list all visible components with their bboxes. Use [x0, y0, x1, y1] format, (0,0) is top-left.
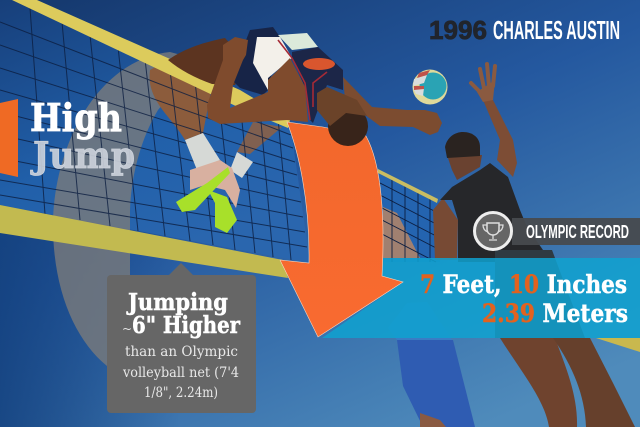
navy shorts	[232, 27, 280, 95]
socks	[185, 133, 253, 178]
heading: 1996 Charles Austin: 1996	[429, 15, 487, 45]
chest logo	[303, 58, 335, 70]
cyan result band	[322, 258, 640, 338]
red singlet trim	[278, 40, 327, 120]
high jumper athlete	[168, 27, 442, 233]
title: High Jump	[30, 95, 135, 177]
callout: comparison to net height: than an Olympic	[125, 344, 238, 360]
white jersey panel	[253, 37, 292, 90]
record measurement: meters: 2.39 Meters	[482, 299, 628, 328]
net mesh	[0, 8, 307, 260]
far arm	[343, 77, 442, 135]
net right band end	[596, 338, 640, 352]
race bib	[278, 33, 318, 50]
title: High Jump: Jump	[30, 135, 135, 177]
blue-shorts player	[388, 302, 475, 427]
upper thigh	[168, 38, 245, 85]
athlete rear legs behind the net	[150, 60, 282, 154]
orange arrow	[280, 122, 403, 337]
net bottom band	[0, 205, 288, 278]
legs	[500, 338, 577, 427]
callout: comparison to net height: 1/8", 2.24m)	[144, 385, 218, 401]
section tab	[0, 99, 18, 177]
callout: comparison to net height: volleyball net (7'4	[122, 365, 239, 381]
back player in black	[433, 64, 635, 427]
raised hand	[471, 64, 495, 102]
volleyball net panel	[0, 0, 310, 263]
volleyball	[412, 70, 448, 104]
lime shoes	[176, 167, 237, 233]
callout: comparison to net height	[107, 263, 256, 413]
heading: 1996 Charles Austin	[429, 15, 620, 45]
callout: comparison to net height: 6" Higher	[132, 312, 241, 339]
neck	[447, 155, 482, 180]
title: High Jump: High	[30, 95, 122, 140]
near arm	[433, 198, 458, 260]
grey arc of the jump path	[53, 52, 200, 366]
Olympic record label	[512, 218, 640, 245]
face	[317, 87, 367, 126]
icon: trophy badge	[474, 212, 512, 250]
raised arm	[483, 100, 517, 177]
shorts under band	[495, 250, 585, 338]
hair	[445, 132, 480, 158]
shoe uppers	[190, 160, 240, 208]
callout: comparison to net height: Jumping	[126, 289, 228, 316]
near arm, chest and hand	[207, 37, 308, 124]
net top band	[12, 0, 290, 128]
black shirt	[440, 163, 555, 262]
navy singlet	[292, 47, 343, 123]
record measurement: feet and inches: 7 Feet, 10 Inches	[420, 270, 627, 299]
net: right section	[378, 169, 440, 262]
callout: comparison to net height: ~	[122, 322, 132, 336]
hair	[328, 106, 368, 146]
